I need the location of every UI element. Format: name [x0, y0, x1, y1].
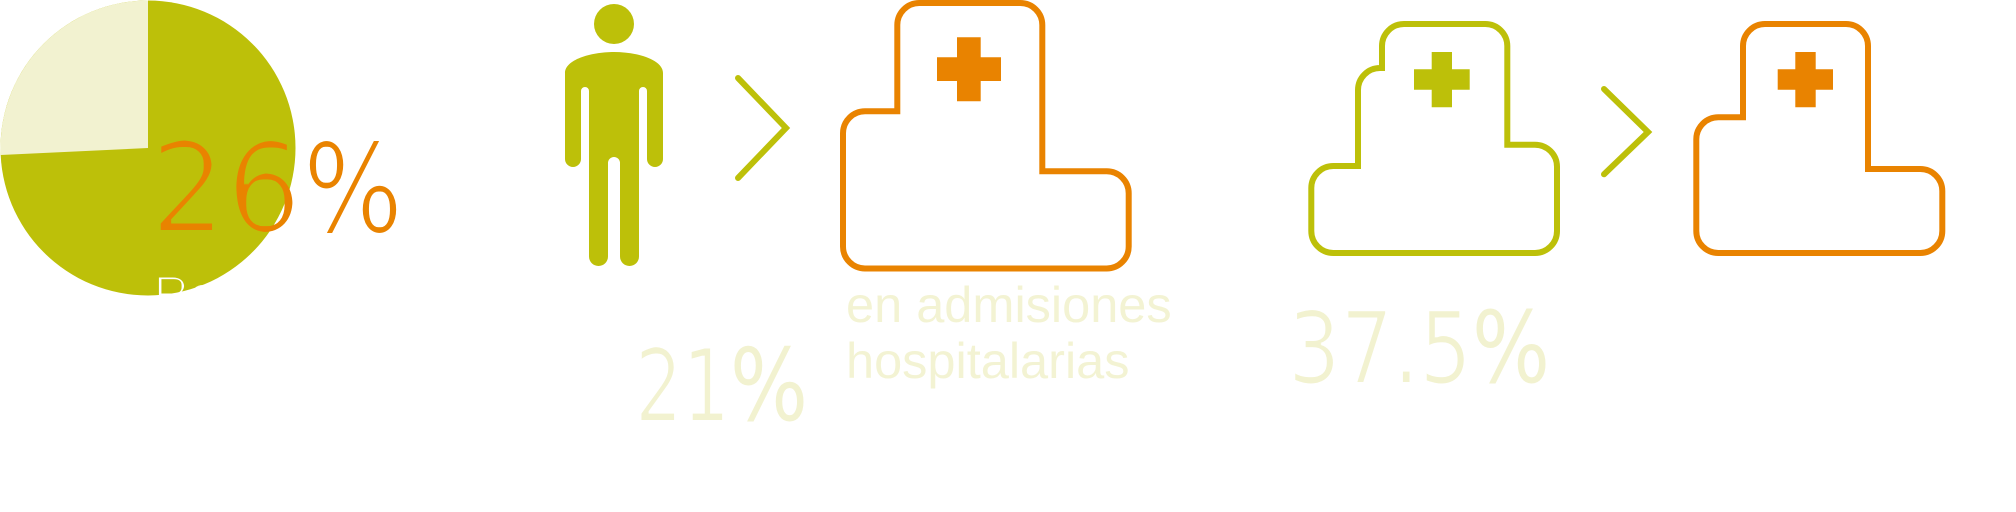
pie slice: 26 percent: [1, 0, 148, 155]
icon: person: [565, 4, 663, 266]
white label cut off at pie edge: Re: [154, 268, 215, 321]
caption: en admisiones hospitalarias: en admisiones: [846, 276, 1172, 333]
icon: medical cross olive: [1414, 52, 1470, 107]
statistic: 21%: %: [730, 327, 808, 444]
pie slice: majority: [0, 0, 296, 296]
icon: medical cross orange: [1778, 52, 1833, 107]
statistic: 26%: %: [303, 118, 403, 262]
pie chart: [0, 0, 296, 296]
statistic: 21%: 21: [635, 327, 730, 445]
statistic: 37.5%: 37.5: [1288, 290, 1472, 407]
statistic: 37.5%: %: [1472, 291, 1550, 406]
statistic: 26%: [150, 115, 403, 262]
panel: orange hospital with caption: [843, 3, 1172, 389]
panel: pie chart with 26% statistic: [0, 0, 403, 321]
person body: [565, 52, 663, 266]
icon: medical cross orange: [937, 37, 1001, 101]
arrow: chevron to second orange hospital: [1604, 89, 1648, 174]
icon: hospital outline olive: [1311, 24, 1557, 253]
statistic: 26%: 26: [150, 115, 302, 262]
panel: second orange hospital: [1696, 24, 1942, 253]
panel: person with 21% statistic: [565, 4, 808, 445]
person head: [594, 4, 634, 44]
arrow: chevron to first hospital: [738, 78, 786, 178]
caption: en admisiones hospitalarias: hospitalarias: [846, 332, 1130, 389]
panel: olive hospital with 37.5% statistic: [1288, 24, 1557, 407]
icon: hospital outline orange: [1696, 24, 1942, 253]
icon: hospital outline orange: [843, 3, 1129, 268]
